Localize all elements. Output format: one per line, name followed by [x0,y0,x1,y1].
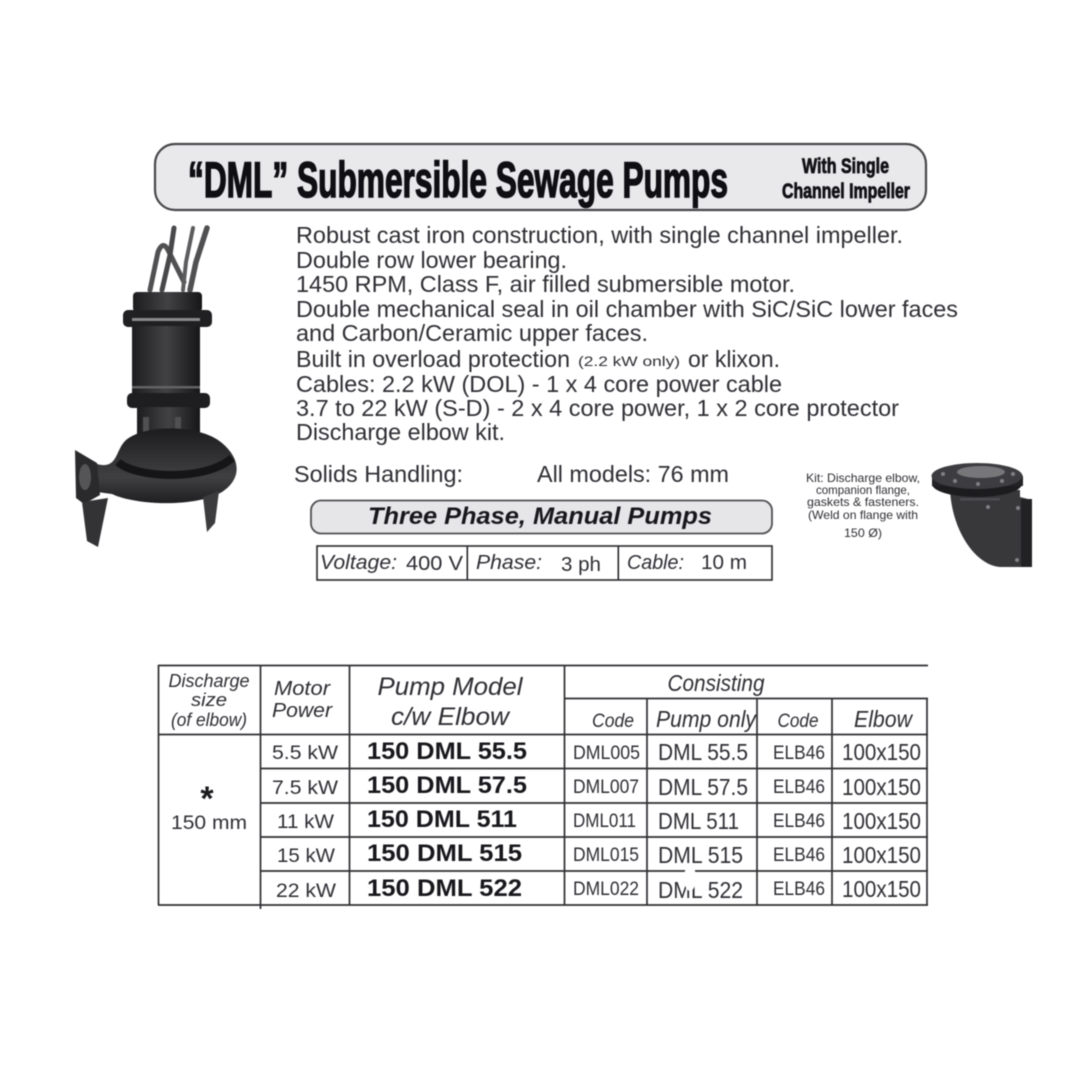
solids handling line: All models: 76 mm [537,461,729,487]
row: 55.5 [272,738,921,765]
row: 515: DML 515 [658,842,743,868]
row: 55.5: 150 DML 55.5 [367,738,527,765]
row: 522: ELB46 [773,879,825,900]
description text block: 1450 RPM, Class F, air filled submersible motor. [296,271,795,297]
impeller note: With Single [802,155,889,178]
row: 511: DML 511 [658,808,739,834]
row: 57.5: 100x150 [842,774,921,800]
row: 55.5: 5.5 kW [272,743,338,764]
description text block: Robust cast iron construction, with single channel impeller. [296,222,903,248]
elbow kit caption: 150 Ø) [844,526,882,540]
table header: Consisting [668,670,765,696]
table header: Code [778,711,818,732]
table header: Pump Model [378,673,524,701]
description text block: Double mechanical seal in oil chamber with SiC/SiC lower faces [296,296,958,322]
specification strip: 10 m [701,552,747,574]
description text block: (2.2 kW only) [578,353,680,369]
description text block: Built in overload protection [296,346,570,372]
row: 515: 150 DML 515 [367,840,522,867]
table grid [158,665,928,909]
row: 57.5: 7.5 kW [272,778,338,799]
row: 511: 150 DML 511 [367,806,517,833]
row: 515: DML015 [573,845,639,866]
row: 522: 150 DML 522 [367,875,522,902]
description text block: Discharge elbow kit. [296,419,505,445]
cables [150,228,207,290]
discharge size cell [171,780,247,834]
row: 511: 11 kW [277,812,334,833]
elbow kit caption [806,471,920,540]
table header: Elbow [854,706,913,732]
row: 57.5: ELB46 [773,777,825,798]
solids handling line [294,461,729,487]
icon: submersible pump photo [75,228,237,547]
elbow kit caption: companion flange, [816,483,910,497]
elbow kit caption: gaskets & fasteners. [807,495,919,509]
specification strip: Cable: [627,552,684,574]
row: 57.5: DML 57.5 [658,774,748,800]
row: 515 [277,840,921,868]
row: 522 [276,875,921,903]
title banner [155,144,926,210]
description text block: 3.7 to 22 kW (S-D) - 2 x 4 core power, 1 x 2 core protector [296,395,899,421]
row: 57.5: 150 DML 57.5 [367,772,527,799]
discharge size cell: * [200,780,214,818]
pump model table [158,665,928,909]
row: 511: DML011 [573,811,636,832]
impeller note [782,155,910,203]
row: 55.5: DML005 [573,743,640,764]
specification strip: Voltage: [320,552,397,574]
row: 511 [277,806,921,834]
row: 55.5: 100x150 [842,739,921,765]
discharge size cell: 150 mm [171,813,247,834]
impeller note: Channel Impeller [782,180,910,203]
elbow kit caption: Kit: Discharge elbow, [806,471,920,485]
table header [168,670,913,732]
row: 522: DML 522 [658,877,743,903]
row: 522: 100x150 [842,876,921,902]
specification strip: Phase: [476,552,542,574]
row: 57.5 [272,772,921,800]
description text block: Cables: 2.2 kW (DOL) - 1 x 4 core power cable [296,371,782,397]
row: 511: ELB46 [773,811,825,832]
row: 522: 22 kW [276,881,336,902]
row: 522: DML022 [573,879,639,900]
solids handling line: Solids Handling: [294,461,463,487]
row: 55.5: DML 55.5 [658,739,748,765]
table header: size [191,690,227,710]
description text block: and Carbon/Ceramic upper faces. [296,320,648,346]
row: 515: 100x150 [842,842,921,868]
sub-heading banner [311,500,772,534]
table header: Motor [274,678,331,700]
row: 515: ELB46 [773,845,825,866]
icon: discharge elbow photo [932,463,1032,567]
description text block: or klixon. [688,346,780,372]
table header: c/w Elbow [391,703,511,731]
description text block: Double row lower bearing. [296,247,567,273]
white smudge [684,865,696,891]
specification strip: 3 ph [561,554,601,576]
elbow kit caption: (Weld on flange with [808,508,918,522]
row: 55.5: ELB46 [773,743,825,764]
table header: Pump only [656,706,757,732]
row: 515: 15 kW [277,846,335,867]
sub-heading banner: Three Phase, Manual Pumps [368,503,712,530]
table header: Code [592,711,634,732]
table header: (of elbow) [171,710,247,730]
row: 511: 100x150 [842,808,921,834]
description text block [296,222,958,445]
table header: Power [272,700,333,722]
row: 57.5: DML007 [573,777,639,798]
title: “DML” Submersible Sewage Pumps [188,152,728,208]
table header: Discharge [168,671,250,691]
specification strip [317,546,772,580]
specification strip: 400 V [406,553,464,575]
